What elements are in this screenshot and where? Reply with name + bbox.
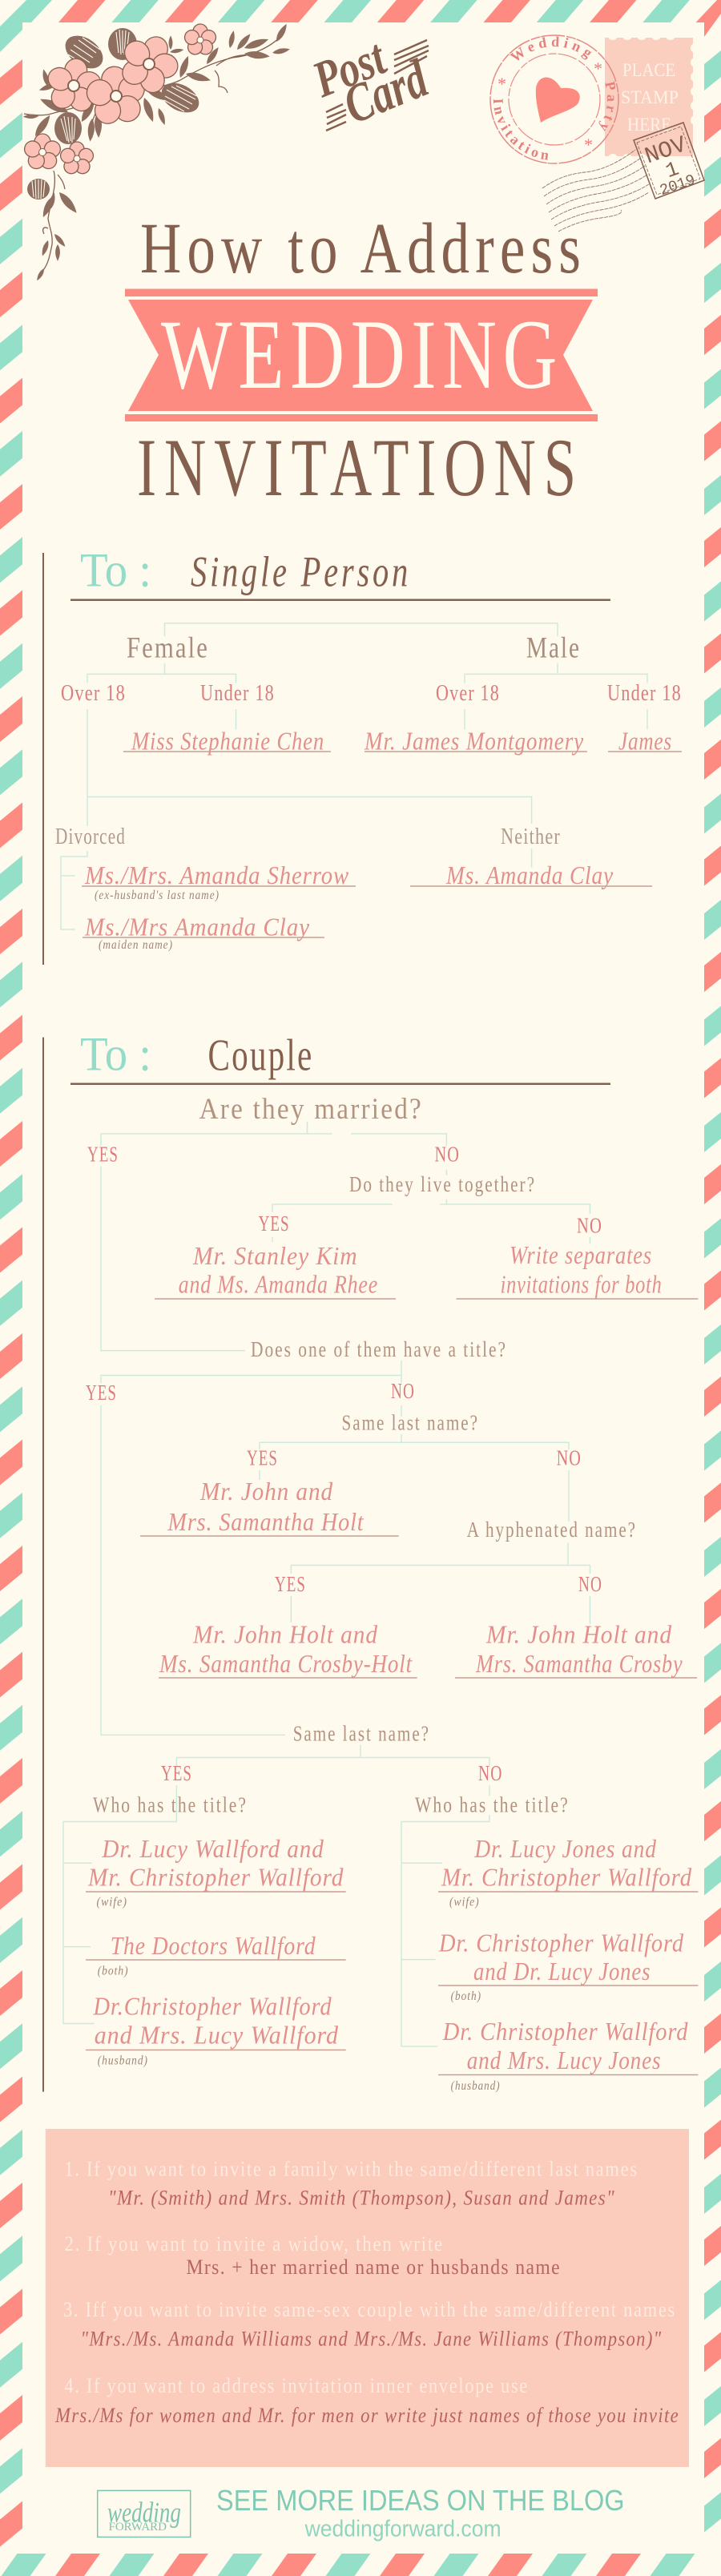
name: Dr.Christopher Wallford and Mrs. Lucy Wallford <box>86 1991 346 2050</box>
question: Does one of them have a title?: Does one of them have a title? <box>251 1337 507 1361</box>
name: Dr. Christopher Wallford and Dr. Lucy Jones: Dr. Christopher Wallford <box>438 1928 684 1957</box>
name: Dr. Lucy Wallford and Mr. Christopher Wallford <box>86 1834 346 1892</box>
post card logo: Post <box>304 28 394 108</box>
label: YES: YES <box>87 1143 119 1167</box>
post card logo: Card <box>335 47 437 135</box>
name: Mr. John and Mrs. Samantha Holt: Mrs. Samantha Holt <box>167 1507 365 1536</box>
date stamp: Nov 1 2019 <box>634 123 704 200</box>
heading: Single Person: Single Person <box>191 548 411 596</box>
question: Who has the title? left: Who has the title? <box>93 1792 248 1816</box>
name: Mr. Stanley Kim and Ms. Amanda Rhee: and Ms. Amanda Rhee <box>179 1270 378 1299</box>
icon: small blossom top <box>183 24 218 57</box>
question: A hyphenated name?: A hyphenated name? <box>467 1518 637 1542</box>
name: Dr. Lucy Wallford and Mr. Christopher Wallford: Dr. Lucy Wallford and <box>101 1834 324 1863</box>
name: Ms./Mrs Amanda Clay: Ms./Mrs Amanda Clay <box>84 913 310 941</box>
wavy cancellation lines <box>542 150 649 232</box>
icon: large blossom right <box>108 25 189 104</box>
name: Dr. Christopher Wallford and Mrs. Lucy Jones: and Mrs. Lucy Jones <box>467 2046 662 2074</box>
question: Who has the title? right: Who has the title? <box>415 1792 570 1816</box>
note: maiden name: (maiden name) <box>99 938 173 952</box>
name: Mr. James Montgomery: Mr. James Montgomery <box>364 726 584 755</box>
decision tree connectors <box>61 623 647 929</box>
logo: wedding forward: FORWARD <box>109 2521 167 2534</box>
tip 4 <box>54 2374 679 2427</box>
round wedding party postmark: Wedding <box>510 37 592 61</box>
label: YES: YES <box>247 1445 278 1469</box>
label: NO: NO <box>557 1445 582 1469</box>
label: NO: NO <box>577 1213 602 1237</box>
tip 1: 1. If you want to invite a family with the same/different last names <box>64 2158 638 2181</box>
date stamp: Nov 1 2019: NOV <box>642 131 691 170</box>
label: Over 18: Over 18 <box>61 681 126 706</box>
round wedding party postmark <box>489 34 619 164</box>
call to action: see more ideas: SEE MORE IDEAS ON THE BLOG <box>216 2484 625 2517</box>
round wedding party postmark: * <box>497 74 506 94</box>
note: both: (both) <box>451 1989 481 2003</box>
note: write separate invitations: invitations for both <box>501 1270 663 1299</box>
label: YES: YES <box>161 1761 192 1785</box>
tip 1: "Mr. (Smith) and Mrs. Smith (Thompson), Susan and James" <box>108 2187 615 2210</box>
heading: To: To : <box>80 1027 151 1080</box>
icon: small blossom lower left <box>22 134 62 171</box>
name: Dr. Christopher Wallford and Mrs. Lucy Jones: Dr. Christopher Wallford <box>442 2017 688 2046</box>
note: wife: (wife) <box>449 1896 480 1909</box>
name: Mr. John and Mrs. Samantha Holt <box>140 1477 399 1536</box>
note: husband: (husband) <box>451 2079 501 2093</box>
label: Divorced: Divorced <box>55 824 126 849</box>
note: write separate invitations: Write separates <box>510 1240 652 1269</box>
icon: large blossom centre <box>81 63 151 131</box>
tip 2: 2. If you want to invite a widow, then write <box>64 2232 444 2256</box>
date stamp: Nov 1 2019: 1 <box>663 157 682 183</box>
note: husband: (husband) <box>98 2054 148 2067</box>
name: Dr. Lucy Jones and Mr. Christopher Wallford <box>438 1834 698 1892</box>
tip 3 <box>63 2298 676 2350</box>
name: Ms./Mrs. Amanda Sherrow: Ms./Mrs. Amanda Sherrow <box>84 861 349 889</box>
postage stamp: place stamp here: HERE <box>627 115 671 135</box>
floral corner illustration <box>22 22 291 281</box>
question: Do they live together?: Do they live together? <box>349 1172 536 1196</box>
name: Dr. Lucy Jones and Mr. Christopher Wallford: Dr. Lucy Jones and <box>474 1834 657 1863</box>
title: How to Address: How to Address <box>140 209 586 288</box>
ribbon banner: Wedding: WEDDING <box>161 300 563 409</box>
label: YES: YES <box>86 1381 117 1405</box>
name: Dr. Lucy Wallford and Mr. Christopher Wallford: Mr. Christopher Wallford <box>87 1862 344 1891</box>
name: Dr.Christopher Wallford and Mrs. Lucy Wallford: Dr.Christopher Wallford <box>93 1991 332 2020</box>
label: YES: YES <box>259 1211 290 1236</box>
panel: additional tips <box>46 2129 689 2467</box>
name: Dr.Christopher Wallford and Mrs. Lucy Wallford: and Mrs. Lucy Wallford <box>95 2021 339 2050</box>
icon: striped leaf clusters <box>27 28 204 200</box>
note: both: (both) <box>98 1965 129 1977</box>
logo: wedding forward <box>98 2490 191 2537</box>
name: Mr. John Holt and Mrs. Samantha Crosby: Mrs. Samantha Crosby <box>475 1649 683 1678</box>
round wedding party postmark: * <box>584 135 593 155</box>
name: Ms. Amanda Clay: Ms. Amanda Clay <box>445 861 614 889</box>
tip 4: 4. If you want to address invitation inner envelope use <box>64 2374 529 2397</box>
name: Mr. John Holt and Ms. Samantha Crosby-Holt: Ms. Samantha Crosby-Holt <box>159 1649 413 1678</box>
name: Dr. Lucy Jones and Mr. Christopher Wallford: Mr. Christopher Wallford <box>441 1862 692 1891</box>
logo: wedding forward: wedding <box>107 2497 181 2529</box>
name: Mr. Stanley Kim and Ms. Amanda Rhee: Mr. Stanley Kim <box>192 1241 358 1270</box>
icon: large blossom left <box>41 54 107 118</box>
branch: Male: Male <box>526 631 581 665</box>
name: Mr. Stanley Kim and Ms. Amanda Rhee <box>155 1241 396 1299</box>
branch: Female: Female <box>127 631 209 665</box>
label: NO: NO <box>578 1572 602 1596</box>
round wedding party postmark: * <box>594 58 602 79</box>
icon: small blossom lower right <box>58 142 95 176</box>
panel: couple <box>42 1027 698 2093</box>
name: Dr. Christopher Wallford and Dr. Lucy Jones <box>438 1928 698 1985</box>
question: Same last name?: Same last name? <box>293 1722 430 1746</box>
question: Same last name?: Same last name? <box>341 1410 479 1434</box>
date stamp: Nov 1 2019: 2019 <box>658 171 698 200</box>
name: James: James <box>618 726 672 755</box>
tip 2: Mrs. + her married name or husbands name <box>186 2256 561 2279</box>
ribbon banner: Wedding <box>125 288 598 421</box>
label: Over 18 male: Over 18 <box>436 681 500 706</box>
decision tree connectors <box>63 1122 590 2046</box>
website url: weddingforward.com <box>304 2517 501 2542</box>
note: wife: (wife) <box>96 1896 127 1909</box>
label: NO: NO <box>434 1143 460 1167</box>
round wedding party postmark: Party <box>599 81 615 131</box>
postage stamp: place stamp here: PLACE <box>622 60 675 80</box>
label: Under 18: Under 18 <box>200 681 275 706</box>
post card logo <box>304 28 437 135</box>
icon: heart <box>536 77 580 123</box>
name: Mr. John Holt and Mrs. Samantha Crosby: Mr. John Holt and <box>485 1620 672 1649</box>
tip 1 <box>64 2158 638 2210</box>
note: ex-husband's last name: (ex-husband's last name) <box>95 889 220 902</box>
note: write separate invitations <box>457 1240 698 1299</box>
name: Mr. John Holt and Ms. Samantha Crosby-Holt <box>159 1620 417 1678</box>
label: Under 18 male: Under 18 <box>607 681 682 706</box>
round wedding party postmark: Invitation <box>493 99 548 160</box>
label: NO: NO <box>478 1761 503 1785</box>
label: NO: NO <box>391 1379 415 1403</box>
name: Miss Stephanie Chen: Miss Stephanie Chen <box>131 726 324 755</box>
question: Are they married?: Are they married? <box>199 1093 423 1126</box>
label: Neither: Neither <box>501 824 561 849</box>
panel: single person <box>42 543 682 965</box>
name: Mr. John Holt and Mrs. Samantha Crosby <box>455 1620 697 1678</box>
name: Dr. Christopher Wallford and Dr. Lucy Jones: and Dr. Lucy Jones <box>473 1957 651 1985</box>
heading: To: To : <box>80 543 151 596</box>
heading: Couple: Couple <box>208 1030 314 1080</box>
name: Mr. John Holt and Ms. Samantha Crosby-Holt: Mr. John Holt and <box>192 1620 378 1649</box>
label: YES: YES <box>275 1572 306 1596</box>
tip 2 <box>64 2232 561 2279</box>
name: The Doctors Wallford: The Doctors Wallford <box>111 1931 316 1960</box>
name: Mr. John and Mrs. Samantha Holt: Mr. John and <box>199 1477 333 1506</box>
postage stamp: place stamp here: STAMP <box>621 87 679 107</box>
name: Dr. Christopher Wallford and Mrs. Lucy Jones <box>438 2017 698 2075</box>
postage stamp: place stamp here <box>605 38 693 156</box>
